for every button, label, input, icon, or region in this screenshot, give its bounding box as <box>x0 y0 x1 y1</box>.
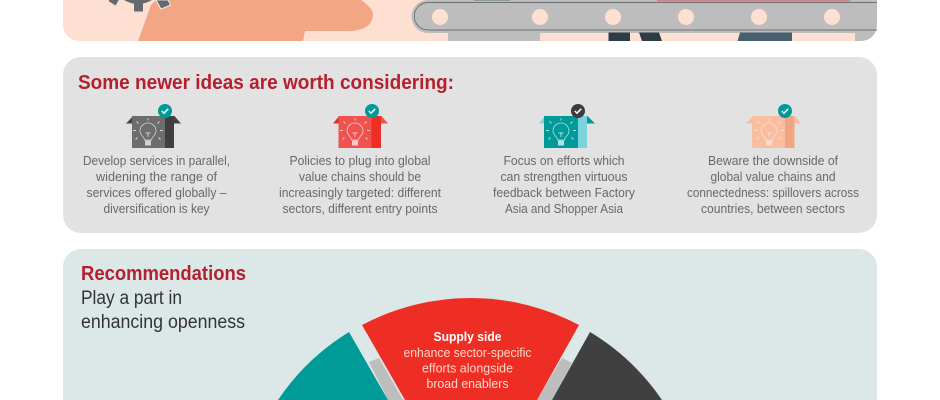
panel: recommendations <box>63 249 877 400</box>
wheel: inner grey ring <box>369 358 572 400</box>
illustration: conveyor belt <box>412 0 877 41</box>
wheel: red supply side segment: Supply side <box>434 330 502 344</box>
text: idea 2: value chains should be <box>299 170 421 184</box>
idea 2 <box>279 104 442 216</box>
illustration: dark legs <box>608 32 792 41</box>
heading: recommendations: Recommendations <box>81 263 246 285</box>
text: idea 2 <box>279 154 442 216</box>
text: play a part: Play a part in <box>81 288 182 309</box>
icon: teal box with bulb <box>539 104 595 148</box>
text: play a part: enhancing openness <box>81 312 245 333</box>
icon: red box with bulb <box>333 104 388 148</box>
text: idea 1: diversification is key <box>104 202 210 216</box>
text: play a part <box>81 288 245 333</box>
icon: gear <box>108 0 170 12</box>
wheel: teal segment <box>278 332 388 400</box>
text: idea 4: countries, between sectors <box>701 202 845 216</box>
text: idea 2: sectors, different entry points <box>282 202 438 216</box>
text: idea 3: Asia and Shopper Asia <box>505 202 623 216</box>
illustration: orange figure <box>138 0 373 41</box>
panel: newer ideas <box>63 57 877 233</box>
wheel: dark segment <box>552 332 662 400</box>
text: idea 1: Develop services in parallel, <box>83 154 230 168</box>
chart: semicircular wheel <box>278 298 662 400</box>
heading: newer ideas: Some newer ideas are worth considering: <box>78 72 454 94</box>
text: idea 3: feedback between Factory <box>493 186 636 200</box>
idea 4 <box>687 104 859 216</box>
wheel: red supply side segment: enhance sector-specific <box>404 346 532 360</box>
text: idea 4: global value chains and <box>710 170 836 184</box>
panel: top illustration banner <box>63 0 877 41</box>
idea 3 <box>493 104 636 216</box>
text: idea 4: Beware the downside of <box>708 154 839 168</box>
wheel: red supply side segment: broad enablers <box>426 377 508 391</box>
text: idea 3: Focus on efforts which <box>504 154 625 168</box>
icon: grey box with bulb <box>126 104 181 148</box>
text: idea 1 <box>83 154 230 216</box>
text: idea 3 <box>493 154 636 216</box>
text: idea 4: connectedness: spillovers across <box>687 186 859 200</box>
text: idea 4 <box>687 154 859 216</box>
wheel: red supply side segment: efforts alongside <box>422 362 513 376</box>
text: idea 1: services offered globally – <box>86 186 227 200</box>
wheel: red supply side segment <box>362 298 579 400</box>
text: idea 3: can strengthen virtuous <box>500 170 628 184</box>
icon: peach box with bulb <box>746 104 801 148</box>
conveyor rollers <box>432 9 840 25</box>
text: idea 1: widening the range of <box>95 170 218 184</box>
text: idea 2: increasingly targeted: different <box>279 186 442 200</box>
text: idea 2: Policies to plug into global <box>290 154 430 168</box>
idea 1 <box>83 104 230 216</box>
